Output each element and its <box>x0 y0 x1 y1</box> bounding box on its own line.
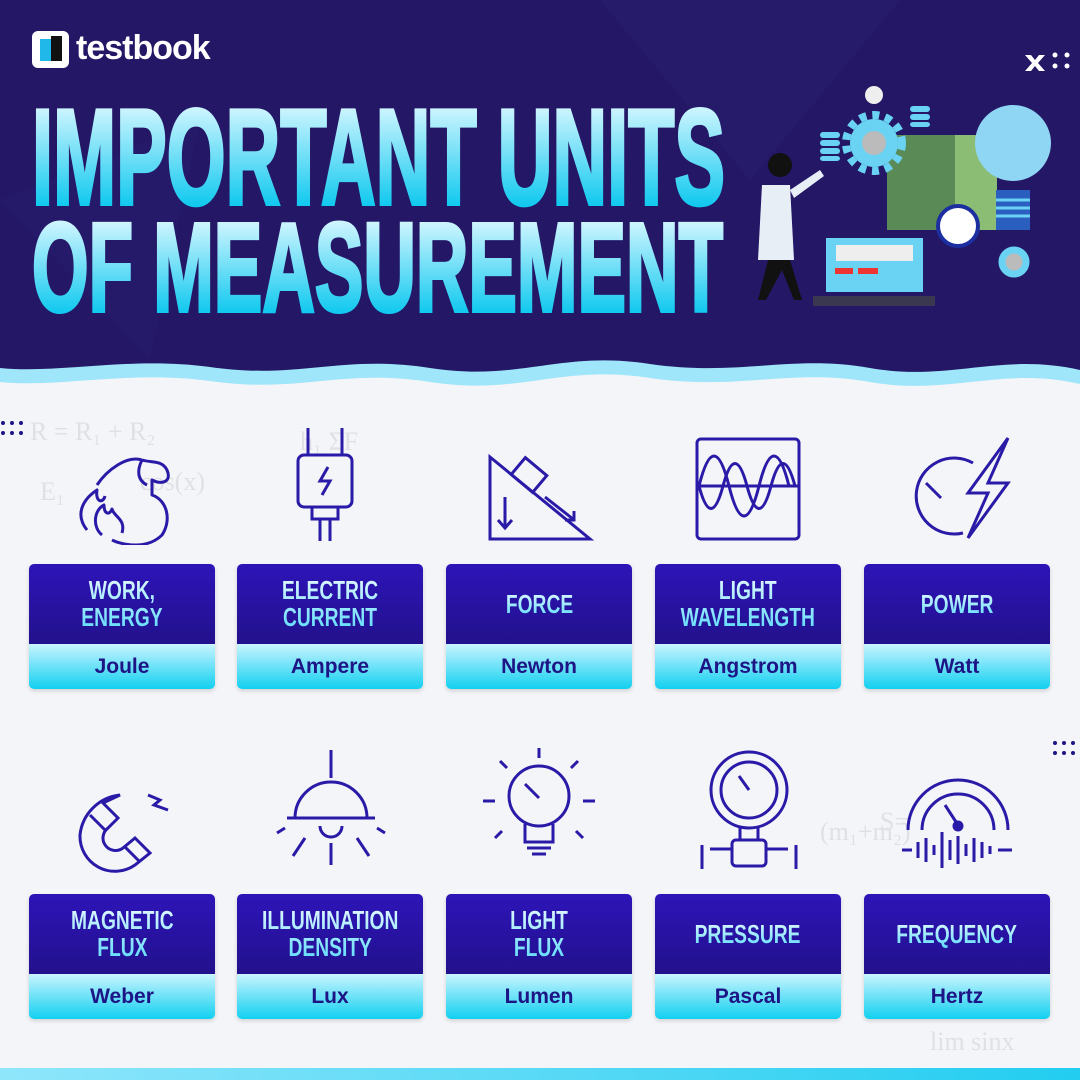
card: magnetic flux <box>29 894 215 1019</box>
card: illumination density: Lux <box>311 984 349 1008</box>
background formulas (decorative): S= <box>880 807 909 836</box>
icon: clock with bolt (power) <box>914 437 1011 539</box>
header background <box>0 0 1080 386</box>
card: pressure: Pascal <box>715 984 781 1008</box>
card: frequency: Hertz <box>931 984 983 1008</box>
icon: ceiling lamp (illumination density) <box>276 750 386 865</box>
card: light flux <box>446 894 632 1019</box>
card: light wavelength: WAVELENGTH <box>681 602 815 632</box>
card: force: FORCE <box>505 588 573 618</box>
card: electric current: CURRENT <box>283 602 377 632</box>
card: force: Newton <box>501 654 577 678</box>
icon: magnet (magnetic flux) <box>78 794 168 873</box>
card: light wavelength: Angstrom <box>698 654 798 678</box>
card: force <box>446 564 632 689</box>
card: light wavelength: LIGHT <box>719 575 777 605</box>
card: work energy <box>29 564 215 689</box>
card: illumination density: DENSITY <box>288 932 372 962</box>
card: pressure <box>655 894 841 1019</box>
card: light wavelength <box>655 564 841 689</box>
icon: gauge with sound wave (frequency) <box>902 778 1012 868</box>
card: light flux: LIGHT <box>510 905 568 935</box>
card: electric current: ELECTRIC <box>282 575 378 605</box>
card: frequency <box>864 894 1050 1019</box>
background formulas (decorative): (m₁+m₂) <box>820 817 911 846</box>
illustration: scientist lab <box>758 52 1070 306</box>
background formulas (decorative) <box>30 417 1015 1056</box>
card: work energy: WORK, <box>89 575 155 605</box>
card: light flux: FLUX <box>514 932 564 962</box>
background formulas (decorative): E₁ <box>40 477 65 506</box>
card: power <box>864 564 1050 689</box>
title <box>32 90 725 330</box>
icon: inclined plane (force) <box>488 454 594 540</box>
card: frequency: FREQUENCY <box>897 918 1017 948</box>
background formulas (decorative): R = R₁ + R₂ <box>30 417 155 446</box>
card: light flux: Lumen <box>505 984 573 1008</box>
card: pressure: PRESSURE <box>695 918 801 948</box>
background formulas (decorative): lim sinx <box>930 1027 1015 1056</box>
background formulas (decorative): cos(x) <box>140 467 205 496</box>
card: magnetic flux: MAGNETIC <box>71 905 173 935</box>
card: power: Watt <box>935 654 979 678</box>
logo: testbook <box>76 29 210 67</box>
card: electric current <box>237 564 423 689</box>
card: electric current: Ampere <box>291 654 369 678</box>
card: work energy: ENERGY <box>81 602 163 632</box>
icon: bulb with needle (light flux) <box>483 748 595 856</box>
icon: muscle with flame (work, energy) <box>79 458 170 545</box>
card: magnetic flux: FLUX <box>97 932 147 962</box>
card: illumination density <box>237 894 423 1019</box>
card: power: POWER <box>921 588 993 618</box>
decorative dots <box>1 421 23 435</box>
icon: wave monitor (light wavelength) <box>696 438 800 540</box>
card: work energy: Joule <box>95 654 149 678</box>
card: illumination density: ILLUMINATION <box>262 905 398 935</box>
icon: pressure gauge (pressure) <box>700 750 798 869</box>
background formulas (decorative): h₁ ΣF <box>300 427 358 456</box>
bottom strip <box>0 1068 1080 1080</box>
background formulas (decorative): PNP <box>700 987 748 1016</box>
background formulas (decorative): mg <box>900 657 933 686</box>
icon: plug (electric current) <box>296 428 354 541</box>
card: magnetic flux: Weber <box>90 984 154 1008</box>
